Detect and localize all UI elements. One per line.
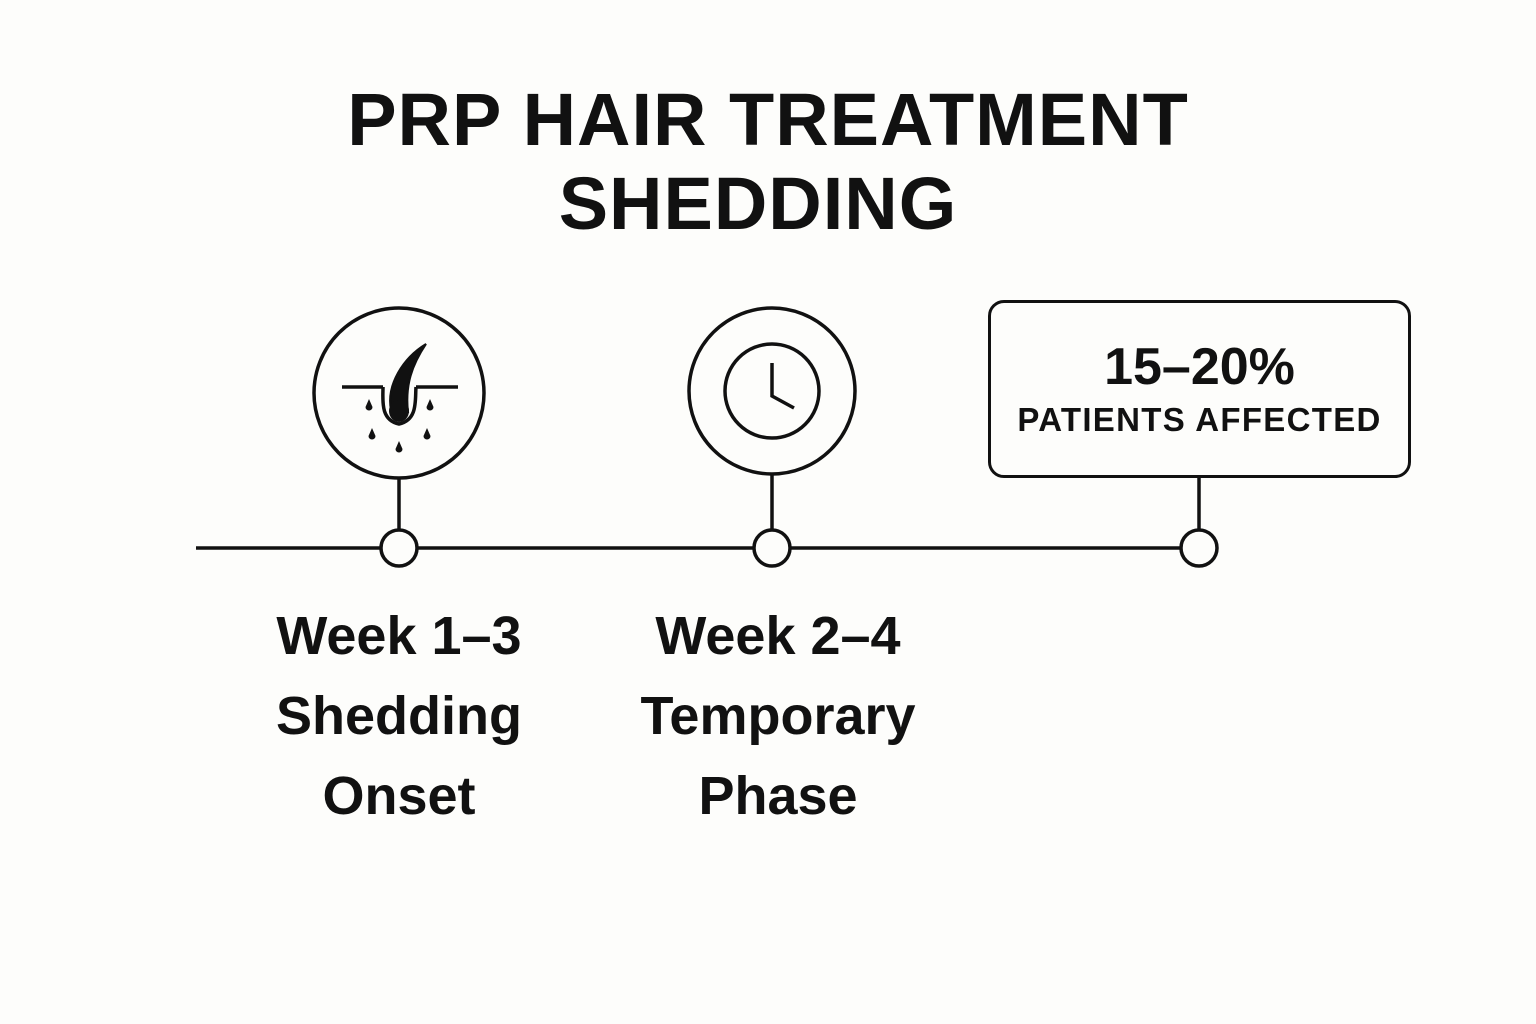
- title: [347, 78, 1189, 245]
- callout: statistic: PATIENTS AFFECTED: [1017, 401, 1382, 438]
- label: week 2-4: Temporary: [640, 686, 916, 746]
- label: week 2-4: Week 2–4: [655, 606, 901, 666]
- label: week 1-3: Shedding: [276, 686, 522, 746]
- label: week 1-3: [276, 606, 522, 826]
- title: SHEDDING: [559, 162, 957, 245]
- callout: statistic: [988, 300, 1411, 478]
- icon: hair follicle: [314, 308, 484, 478]
- label: week 1-3: Week 1–3: [276, 606, 522, 666]
- label: week 1-3: Onset: [322, 766, 476, 826]
- label: week 2-4: Phase: [698, 766, 858, 826]
- timeline axis: [196, 546, 1182, 550]
- icon: clock: [689, 308, 855, 474]
- label: week 2-4: [640, 606, 916, 826]
- title: PRP HAIR TREATMENT: [347, 78, 1189, 161]
- callout: statistic: 15–20%: [1104, 338, 1295, 396]
